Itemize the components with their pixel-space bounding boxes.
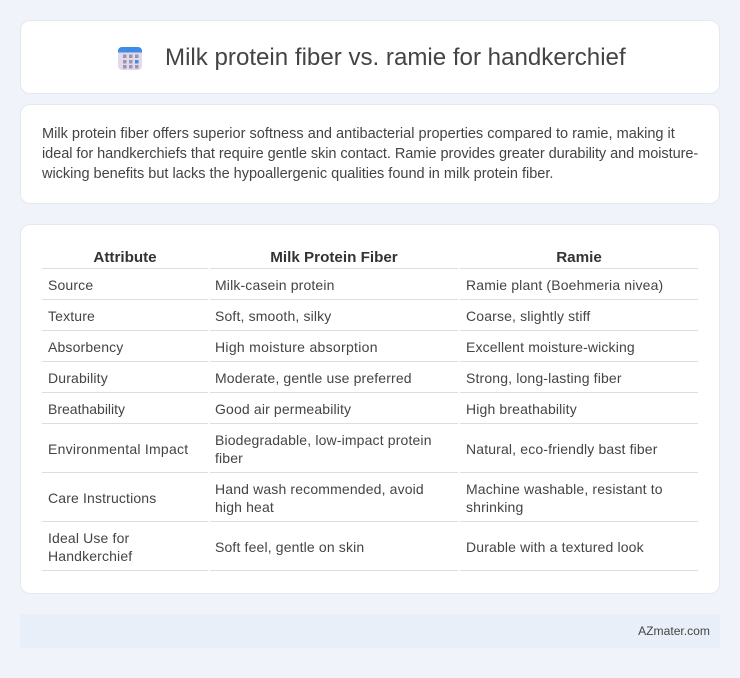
row: Breathability: Good air permeability (215, 401, 351, 417)
row: Absorbency (48, 339, 635, 355)
row: Ideal Use for Handkerchief: Durable with a textured look (466, 539, 644, 555)
row: Environmental Impact (48, 432, 658, 466)
column header: Attribute: Attribute (93, 249, 157, 266)
row: Breathability (48, 401, 577, 417)
panel: comparison table card (20, 224, 720, 594)
summary text: wicking benefits but lacks the hypoallergenic qualities found in milk protein fiber. (42, 166, 553, 182)
icon: calendar (118, 47, 142, 70)
row: Texture: Coarse, slightly stiff (466, 308, 590, 324)
summary text: Milk protein fiber offers superior softness and antibacterial properties compared to ramie, making it (42, 126, 675, 142)
row: Absorbency: Absorbency (48, 339, 123, 355)
panel: summary card (20, 104, 720, 204)
row: Source: Source (48, 277, 93, 293)
row: Care Instructions: Care Instructions (48, 490, 156, 506)
row: Durability: Moderate, gentle use preferred (215, 370, 412, 386)
footer credit: AZmater.com (638, 624, 710, 638)
row: Environmental Impact: Natural, eco-friendly bast fiber (466, 441, 658, 457)
summary text: ideal for handkerchiefs that require gentle skin contact. Ramie provides greater durability and moisture- (42, 146, 698, 162)
row: Ideal Use for Handkerchief: Ideal Use for (48, 530, 129, 546)
row: Breathability: Breathability (48, 401, 125, 417)
row: Care Instructions: high heat (215, 499, 274, 515)
panel: title card (20, 20, 720, 94)
row: Environmental Impact: Biodegradable, low-impact protein (215, 432, 432, 448)
row: Care Instructions: shrinking (466, 499, 523, 515)
row: Ideal Use for Handkerchief: Handkerchief (48, 548, 132, 564)
row: Texture (48, 308, 590, 324)
row: Care Instructions: Hand wash recommended, avoid (215, 481, 424, 497)
footer bar (20, 614, 720, 648)
row: Absorbency: High moisture absorption (215, 339, 378, 355)
row: Texture: Texture (48, 308, 95, 324)
row: Source: Milk-casein protein (215, 277, 335, 293)
column header: Ramie: Ramie (556, 249, 602, 266)
row: Texture: Soft, smooth, silky (215, 308, 331, 324)
row: Durability (48, 370, 622, 386)
row: Source: Ramie plant (Boehmeria nivea) (466, 277, 663, 293)
column header: Milk Protein Fiber: Milk Protein Fiber (270, 249, 398, 266)
row: Care Instructions (48, 481, 663, 515)
row: Source (48, 277, 663, 293)
row: Absorbency: Excellent moisture-wicking (466, 339, 635, 355)
row: Durability: Strong, long-lasting fiber (466, 370, 622, 386)
row: Ideal Use for Handkerchief: Soft feel, gentle on skin (215, 539, 364, 555)
row: Environmental Impact: fiber (215, 450, 243, 466)
summary text (42, 126, 698, 182)
row: Ideal Use for Handkerchief (48, 530, 644, 564)
row: Breathability: High breathability (466, 401, 577, 417)
row: Environmental Impact: Environmental Impact (48, 441, 188, 457)
row: Durability: Durability (48, 370, 108, 386)
title: Milk protein fiber vs. ramie for handkerchief (165, 44, 626, 71)
row: Care Instructions: Machine washable, resistant to (466, 481, 663, 497)
